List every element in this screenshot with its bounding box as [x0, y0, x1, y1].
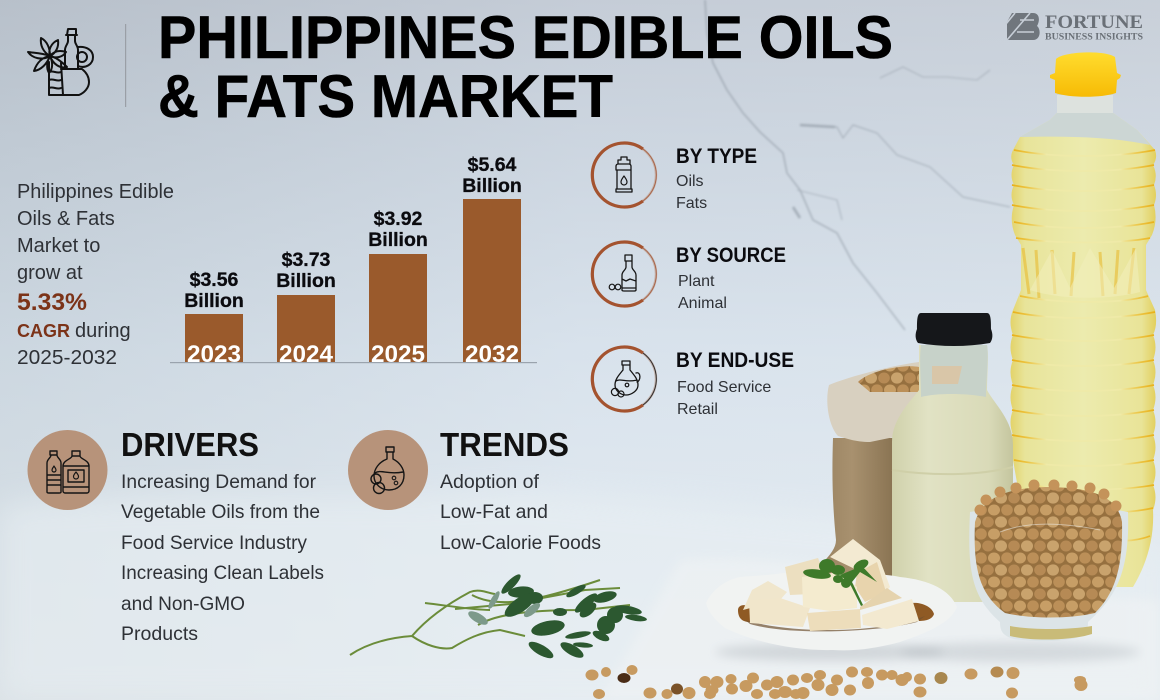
bar 2032	[462, 154, 522, 368]
bar 2024: 2024	[279, 341, 334, 368]
segment: by type: Fats	[676, 195, 707, 212]
logo: Fortune Business Insights: BUSINESS INSIGHTS	[1045, 32, 1143, 42]
bar 2025: Billion	[368, 229, 428, 251]
trends panel: Adoption of	[440, 471, 540, 493]
icon: trends flask	[348, 430, 428, 510]
photo: soy milk bottle	[892, 313, 1013, 602]
CAGR text block: CAGR	[17, 321, 70, 341]
icon: drivers bottles	[28, 430, 108, 510]
header divider	[125, 24, 126, 107]
drivers panel: Increasing Clean Labels	[121, 562, 324, 584]
CAGR text block: grow at	[17, 262, 83, 284]
icon: oil jar ring	[592, 143, 656, 207]
icon: palm tree and oil jug	[28, 29, 93, 95]
logo: Fortune Business Insights	[1006, 13, 1143, 42]
bar 2023: Billion	[184, 290, 244, 312]
title	[158, 4, 893, 130]
CAGR text block: Market to	[17, 235, 100, 257]
photo: scattered soybeans	[586, 665, 1088, 699]
trends panel	[348, 426, 601, 554]
bar chart	[170, 154, 537, 368]
CAGR text block: Oils & Fats	[17, 208, 115, 230]
icon: bottle ring	[592, 242, 656, 306]
bar 2024: Billion	[276, 270, 336, 292]
trends panel: Low-Calorie Foods	[440, 532, 601, 554]
drivers panel: Products	[121, 623, 198, 645]
segment: by source: Animal	[678, 295, 727, 312]
bar 2032: 2032	[465, 341, 519, 368]
photo: oil bottle	[1010, 52, 1156, 587]
drivers panel: Food Service Industry	[121, 532, 307, 554]
photo: sack of soybeans	[806, 362, 919, 585]
garnish: parsley	[803, 557, 877, 606]
CAGR text block	[17, 181, 174, 369]
photo: glass bowl of soybeans	[969, 480, 1128, 641]
bar 2024: $3.73	[282, 249, 331, 271]
segment: by source: Plant	[678, 273, 715, 290]
segment: by source	[592, 242, 786, 312]
segment: by end-use: Retail	[677, 401, 718, 418]
title: PHILIPPINES EDIBLE OILS	[158, 4, 893, 71]
drivers panel: DRIVERS	[121, 426, 259, 463]
bar 2023: 2023	[187, 341, 241, 368]
segment: by end-use: Food Service	[677, 379, 771, 396]
drivers panel: and Non-GMO	[121, 593, 245, 615]
bar 2032: Billion	[462, 175, 522, 197]
title: & FATS MARKET	[158, 63, 613, 130]
bar 2025: $3.92	[374, 208, 423, 230]
segment: by type: Oils	[676, 173, 704, 190]
bottle lid	[916, 313, 992, 346]
bar 2023	[184, 269, 244, 368]
segment: by type	[592, 143, 757, 212]
bar 2024	[276, 249, 336, 368]
trends panel: TRENDS	[440, 426, 569, 463]
bar 2025: 2025	[371, 341, 425, 368]
bar 2025	[368, 208, 428, 368]
bar 2023: $3.56	[190, 269, 239, 291]
icon: oil cruet ring	[592, 347, 656, 411]
bottle cap	[1050, 52, 1121, 97]
CAGR text block: Philippines Edible	[17, 181, 174, 203]
drivers panel: Vegetable Oils from the	[121, 501, 320, 523]
trends panel: Low-Fat and	[440, 501, 548, 523]
segment: by source: BY SOURCE	[676, 244, 786, 267]
CAGR text block: 5.33%	[17, 289, 87, 316]
drivers panel: Increasing Demand for	[121, 471, 316, 493]
CAGR text block: 2025-2032	[17, 347, 117, 369]
photo: herb sprig	[350, 572, 647, 661]
segment: by end-use: BY END-USE	[676, 349, 794, 372]
bar 2032: $5.64	[468, 154, 517, 176]
segment: by end-use	[592, 347, 794, 418]
drivers panel	[28, 426, 324, 645]
photo: plate of tofu	[706, 539, 957, 661]
segment: by type: BY TYPE	[676, 145, 757, 168]
logo: Fortune Business Insights: FORTUNE	[1045, 13, 1143, 33]
CAGR text block: during	[75, 320, 131, 342]
